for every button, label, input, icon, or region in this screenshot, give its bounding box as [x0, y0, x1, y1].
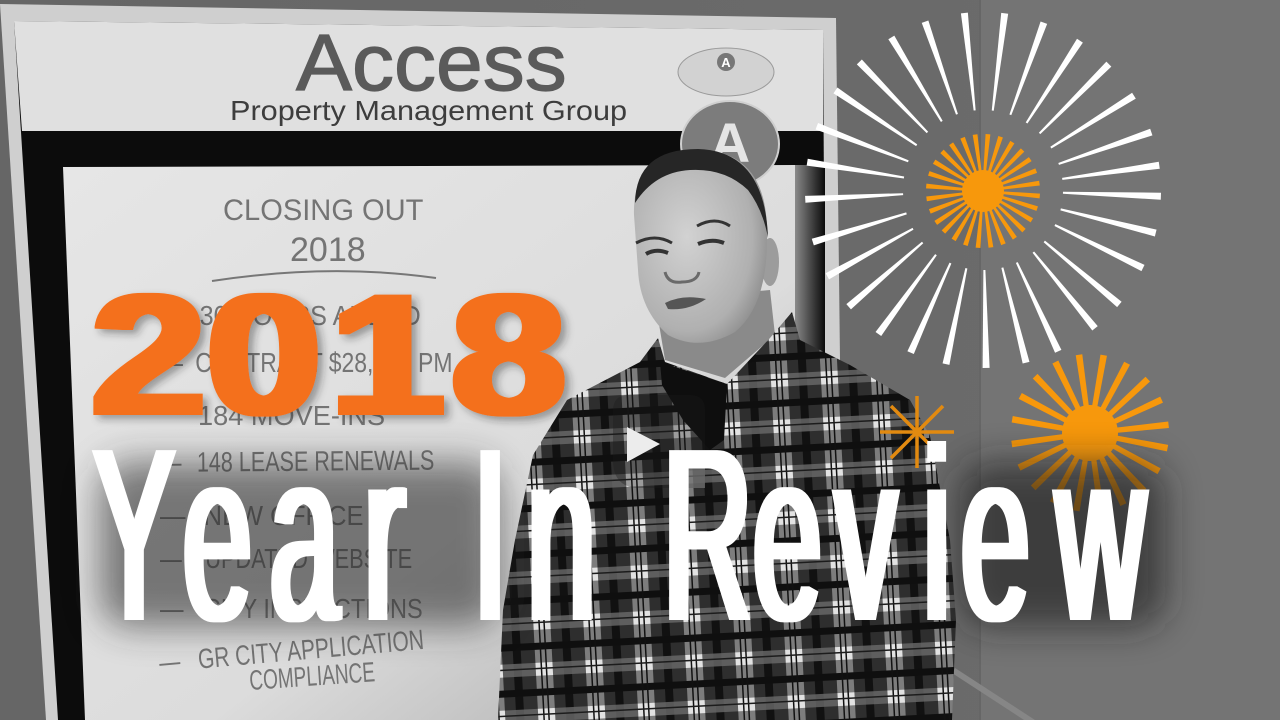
handwritten whiteboard list: —	[158, 646, 182, 679]
neck	[655, 290, 775, 378]
handwritten whiteboard list: —	[160, 594, 184, 624]
logo badge oval: A	[721, 55, 731, 70]
dark shadow behind heading	[100, 462, 1165, 627]
logo: Access Property Management Group	[230, 19, 627, 127]
handwritten whiteboard list: CONTRACT $28,000 PM	[195, 348, 452, 379]
face	[634, 150, 767, 343]
2018 heading: 2018	[91, 259, 566, 451]
man	[498, 149, 956, 720]
hair	[635, 149, 768, 238]
orange star firework	[880, 396, 954, 468]
handwritten whiteboard list: 184 MOVE-INS	[198, 400, 385, 431]
mouth	[665, 297, 706, 309]
eyes and brows	[636, 221, 730, 254]
white firework	[805, 13, 1161, 368]
handwritten whiteboard list: GR CITY APPLICATION	[197, 625, 425, 675]
whiteboard surface	[63, 165, 795, 720]
Year In Review heading: Year In Review	[93, 397, 1146, 673]
handwritten whiteboard list: CITY INSPECTIONS	[204, 594, 423, 624]
whiteboard sign frame	[0, 4, 840, 720]
handwritten whiteboard list: —	[160, 348, 183, 379]
handwritten whiteboard list: UPDATED WEBSITE	[205, 543, 412, 575]
nose	[665, 272, 699, 282]
plaid shirt	[498, 312, 956, 720]
ear	[761, 238, 779, 286]
handwritten whiteboard list: CLOSING OUT	[223, 194, 423, 227]
handwritten whiteboard list: NEW OFFICE	[204, 500, 364, 531]
handwritten whiteboard list: 2018	[290, 231, 366, 269]
handwritten whiteboard list	[158, 194, 452, 697]
logo: Access Property Management Group: Property Management Group	[230, 95, 627, 127]
handwritten whiteboard list: 30 DOORS ADDED	[200, 300, 421, 331]
handwritten whiteboard list: COMPLIANCE	[248, 657, 376, 697]
black undershirt	[660, 362, 727, 450]
logo: Access Property Management Group: Access	[296, 19, 567, 108]
logo circle A: A	[710, 111, 750, 174]
orange firework lower right	[1011, 354, 1169, 512]
handwritten whiteboard list: —	[160, 447, 182, 479]
handwritten whiteboard list: —	[160, 543, 183, 575]
orange firework center	[926, 134, 1040, 248]
logo circle A	[681, 101, 779, 187]
handwritten whiteboard list: 148 LEASE RENEWALS	[197, 445, 434, 478]
play button	[613, 395, 705, 488]
handwritten whiteboard list: —	[160, 500, 186, 531]
logo badge oval	[678, 48, 774, 96]
handwritten whiteboard list: —	[160, 300, 186, 331]
